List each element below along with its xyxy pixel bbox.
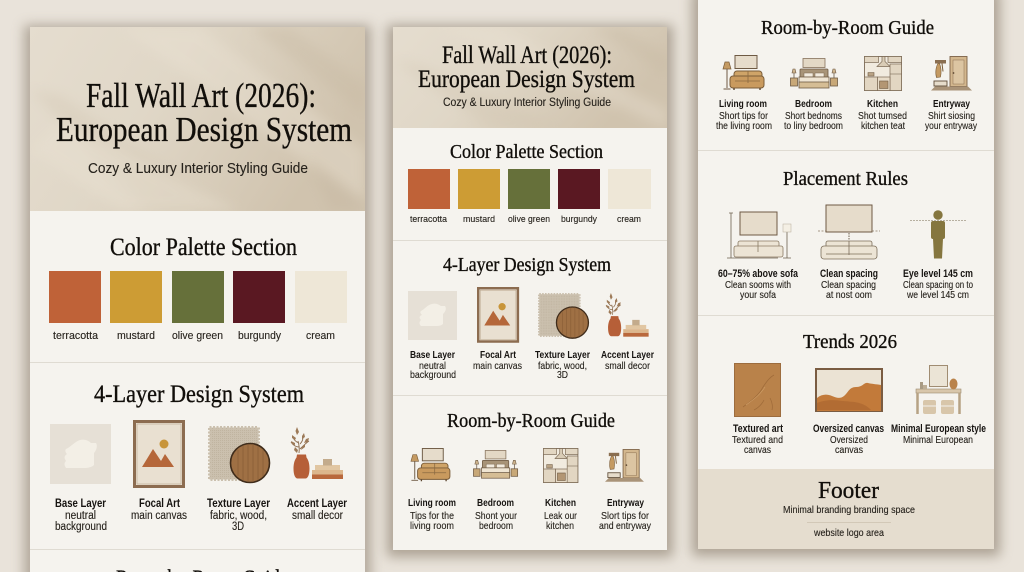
header block: centre poster (393, 27, 667, 128)
swatch labels: cream (617, 214, 641, 225)
placement labels (718, 268, 973, 301)
placement labels: 60–75% above sofa (718, 268, 799, 280)
layer labels: 3D (232, 521, 244, 533)
layer labels: fabric, wood, (210, 510, 267, 522)
layer labels: Accent Layer (287, 496, 347, 510)
layer labels: background (55, 521, 107, 533)
subtitle: Cozy & Luxury Interior Styling Guide (443, 97, 611, 109)
heading: room-by-room guide: Room-by-Room Guide (761, 17, 934, 39)
room labels: Bedroom (795, 98, 832, 110)
swatch labels (410, 214, 641, 225)
room labels: Shirt siosing (928, 110, 975, 122)
placement labels: your sofa (740, 289, 776, 301)
heading: color palette: Color Palette Section (110, 234, 297, 261)
layer labels: small decor (605, 360, 650, 372)
icon: base layer (50, 424, 111, 484)
room labels: Short bednoms (785, 110, 842, 122)
icon: living room (723, 56, 764, 90)
swatch labels: cream (306, 330, 335, 342)
room labels (716, 98, 978, 132)
room labels: Living room (719, 98, 767, 110)
diagram: eye level figure (910, 210, 967, 258)
layer labels: Texture Layer (207, 496, 270, 510)
placement labels: Clean sooms with (725, 279, 791, 291)
trend labels: canvas (744, 444, 771, 456)
layer labels: neutral (419, 360, 446, 372)
placement labels: Clean spacing (821, 279, 876, 291)
placement labels: we level 145 cm (906, 289, 969, 301)
artwork: textured art (734, 364, 780, 416)
icon: bedroom (790, 58, 838, 88)
trend labels: Minimal European (903, 434, 973, 446)
colour swatches (408, 169, 651, 209)
icon: living room (411, 448, 450, 481)
layer labels: Focal Art (480, 349, 516, 361)
title (418, 40, 635, 93)
placement labels: Clean spacing on to (903, 279, 973, 291)
artwork: oversized canvas (816, 369, 882, 411)
panel: right poster (698, 0, 994, 549)
trend labels: Textured and (732, 434, 783, 446)
icon: accent layer (291, 427, 343, 479)
icon: entryway (605, 449, 644, 482)
footer website logo area: website logo area (813, 527, 884, 539)
icon: focal art (478, 288, 518, 342)
layer labels: Accent Layer (601, 349, 654, 361)
layer labels: neutral (65, 510, 96, 522)
room labels: Shont your (475, 510, 517, 522)
heading: color palette: Color Palette Section (450, 141, 603, 163)
room labels: living room (410, 520, 454, 532)
layer labels (55, 496, 347, 533)
shadows (24, 25, 371, 572)
trend labels: Textured art (733, 423, 783, 435)
room labels: your entryway (925, 120, 978, 132)
room labels: kitchen (546, 520, 574, 532)
room labels: and entryway (599, 520, 652, 532)
title (56, 76, 352, 149)
panel: large poster, left (30, 27, 365, 572)
room labels: kitchen teat (861, 120, 905, 132)
placement labels: at nost oom (826, 289, 872, 301)
swatch labels: burgundy (561, 214, 597, 225)
placement labels: Clean spacing (820, 268, 878, 280)
title: Fall Wall Art (2026): (86, 76, 316, 115)
swatch labels: terracotta (53, 330, 99, 342)
header block: left poster (30, 27, 365, 211)
icon: accent layer (606, 293, 649, 337)
swatch labels: mustard (117, 330, 155, 342)
room labels: bedroom (479, 520, 513, 532)
swatch labels: olive green (172, 330, 223, 342)
room labels: Tips for the (410, 510, 454, 522)
icon: texture layer (210, 428, 270, 482)
trend labels: canvas (835, 444, 863, 456)
room labels: Slort tips for (601, 510, 649, 522)
colour swatches (49, 271, 347, 323)
icon: focal art (134, 422, 184, 486)
trend labels: Minimal European style (891, 423, 986, 435)
title: European Design System (418, 64, 635, 93)
trend labels: Oversized canvas (813, 423, 884, 435)
placement labels: Eye level 145 cm (903, 268, 973, 280)
title: European Design System (56, 110, 352, 149)
layer labels (410, 349, 654, 381)
diagram: clean spacing (818, 205, 880, 259)
swatch labels: burgundy (238, 330, 281, 342)
icon: minimal console (916, 366, 961, 414)
layer labels: main canvas (131, 510, 187, 522)
layer labels: background (410, 369, 456, 381)
subtitle: Cozy & Luxury Interior Styling Guide (88, 160, 308, 177)
room labels: Leak our (544, 510, 577, 522)
title: Fall Wall Art (2026): (442, 40, 612, 69)
room labels: Entryway (607, 497, 644, 509)
layer labels: 3D (557, 369, 568, 381)
room labels: to liny bedroom (784, 120, 843, 132)
heading: 4-layer design system: 4-Layer Design System (94, 381, 304, 408)
room labels: Short tips for (719, 110, 768, 122)
swatch labels: terracotta (410, 214, 448, 225)
icon: texture layer (539, 294, 588, 338)
layer labels: small decor (292, 510, 343, 522)
room labels: the living room (716, 120, 772, 132)
heading: room-by-room guide: Room-by-Room Guide (447, 410, 615, 432)
layer labels: main canvas (473, 360, 522, 372)
icon: kitchen (543, 448, 578, 482)
layer labels: fabric, wood, (538, 360, 587, 372)
heading: trends 2026: Trends 2026 (803, 331, 897, 353)
heading: 4-layer design system: 4-Layer Design System (443, 254, 611, 276)
footer heading: Footer (818, 478, 879, 504)
layer labels: Focal Art (139, 496, 180, 510)
layer labels: Base Layer (55, 496, 106, 510)
room labels: Kitchen (867, 98, 898, 110)
icon: base layer (408, 291, 457, 340)
icon: kitchen (864, 56, 902, 90)
icon: entryway (931, 56, 972, 90)
layer labels: Base Layer (410, 349, 455, 361)
trend labels: Oversized (830, 434, 868, 446)
room labels: Living room (408, 497, 456, 509)
room labels: Kitchen (545, 497, 576, 509)
swatch labels: olive green (508, 214, 550, 225)
footer branding text: Minimal branding branding space (783, 504, 915, 516)
layer labels: Texture Layer (535, 349, 590, 361)
swatch labels (53, 330, 335, 342)
room labels (408, 497, 652, 532)
trend labels (732, 423, 986, 456)
panel: medium poster, centre (393, 27, 667, 550)
footer (698, 469, 994, 549)
diagram: art above sofa (727, 212, 791, 258)
heading: placement rules: Placement Rules (783, 168, 908, 190)
room labels: Shot tumsed (858, 110, 907, 122)
room labels: Bedroom (477, 497, 514, 509)
room labels: Entryway (933, 98, 970, 110)
icon: bedroom (473, 450, 518, 478)
swatch labels: mustard (463, 214, 495, 225)
